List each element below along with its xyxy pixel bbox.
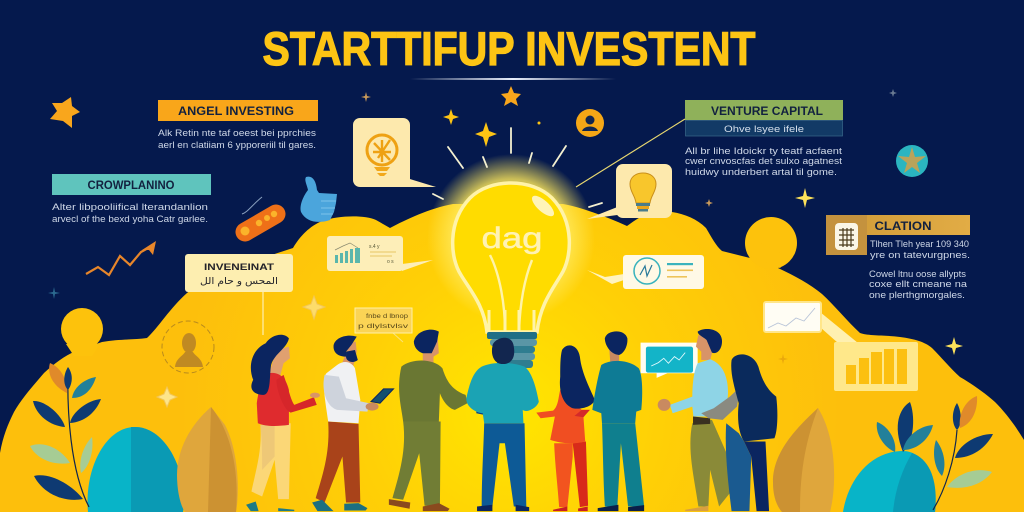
left plants [30, 363, 238, 512]
speech bubble above bearded man: p dlylstvlsv [358, 324, 408, 330]
sprig [30, 363, 101, 507]
panel: angel investing [158, 100, 318, 150]
person: man in light blue [658, 329, 730, 511]
panel: crowdfunding: Alter libpooliifical lterandanlion [52, 202, 208, 212]
panel: clation: Tlhen Tleh year 109 340 [870, 239, 969, 249]
panel: venture capital: huidwy underbert artal til gome. [685, 167, 837, 177]
speech bubble above bearded man [355, 308, 412, 342]
icon: investor avatar [162, 321, 214, 373]
panel: venture capital: All br lihe Idoickr ty teatf acfaent [685, 146, 842, 156]
icon: orange pill [240, 197, 277, 236]
callout: inventor label [185, 254, 293, 335]
callout: analytics card [587, 255, 704, 289]
panel: angel investing: ANGEL INVESTING [178, 104, 294, 118]
panel: angel investing: Alk Retin nte taf oeest bei pprchies [158, 128, 316, 138]
chart panel: bars with line callout [764, 302, 918, 391]
panel: clation: coxe ellt cmeane na [869, 279, 968, 289]
bulb label: dag [482, 222, 542, 255]
panel: crowdfunding: CROWPLANINO [88, 178, 174, 192]
person: woman in orange [536, 345, 595, 511]
panel: venture capital [685, 100, 843, 177]
callout: inventor label: المحس و حام الل [200, 276, 278, 287]
brown leaf [773, 408, 834, 512]
person: bearded man with tablet [312, 336, 394, 511]
title: STARTTIFUP INVESTENT [262, 22, 756, 75]
large teal leaf [88, 427, 184, 512]
bulb base [487, 310, 537, 368]
yellow hill background shape [0, 204, 1024, 512]
callout: bulb [587, 164, 672, 219]
callout: bar chart note: s.4 y [369, 244, 380, 250]
panel: crowdfunding [52, 174, 211, 224]
icon: growth arrow [86, 241, 156, 275]
callout: bar chart note [327, 236, 433, 271]
icon: star left [50, 97, 80, 128]
glow and rays [427, 119, 685, 322]
panel: clation: one plerthgmorgales. [869, 290, 965, 300]
panel: clation [826, 215, 970, 300]
panel: angel investing: aerl en clatiiam 6 ypporeriil til gares. [158, 140, 316, 150]
group of people [246, 329, 777, 511]
speech bubble above bearded man: fnbe d lbnop [366, 314, 409, 320]
speech bubble: teal chart [641, 343, 698, 378]
panel: clation: Cowel ltnu oose allypts [869, 269, 966, 279]
icon: user badge [576, 109, 604, 137]
large teal leaf [843, 451, 936, 512]
right plants [773, 396, 993, 512]
lightbulb [453, 183, 569, 368]
panel: venture capital: cwer cnvoscfas det sulxo agatnest [685, 156, 842, 166]
person: woman in red [246, 335, 320, 511]
brown leaf [177, 407, 238, 512]
panel: clation: CLATION [874, 219, 932, 233]
sprig [877, 396, 993, 510]
person: man in dark teal [592, 331, 644, 511]
callout: bar chart note: o s [387, 259, 394, 265]
decorative stars and sparkles [48, 86, 963, 407]
person: man in teal centre [466, 338, 539, 511]
person: man in olive [389, 330, 467, 511]
icon: calendar [835, 223, 858, 250]
panel: venture capital: VENTURE CAPITAL [711, 104, 823, 118]
panel: clation: yre on tatevurgpnes. [870, 250, 970, 260]
person: woman with backpack [701, 354, 777, 511]
panel: crowdfunding: arvecl of the bexd yoha Catr garlee. [52, 214, 208, 224]
callout: inventor label: INVENEINAT [204, 262, 274, 273]
callout: dollar bulb [353, 118, 436, 187]
panel: venture capital: Ohve lsyee ifele [724, 124, 804, 134]
icon: thumbs up [301, 177, 337, 222]
icon: globe [896, 145, 928, 177]
